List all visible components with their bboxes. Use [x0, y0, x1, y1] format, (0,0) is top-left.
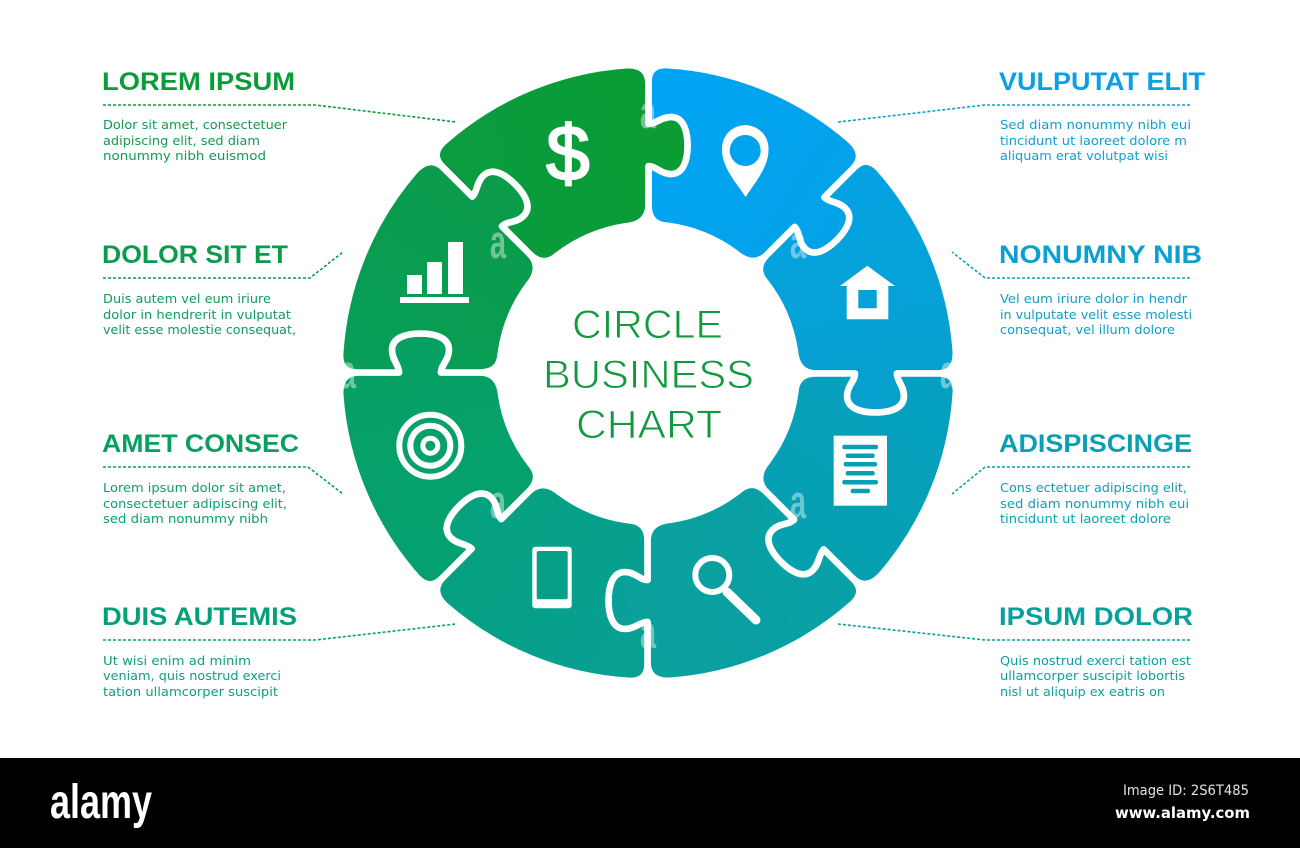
callout: Vulputat Elit: [838, 68, 1205, 163]
body text: dolor in hendrerit in vulputat: [103, 307, 291, 322]
callout: Lorem Ipsum: [102, 68, 456, 163]
body text: tincidunt ut laoreet dolore m: [1000, 133, 1187, 148]
icon: bar chart: [400, 242, 469, 303]
body text: tincidunt ut laoreet dolore: [1000, 511, 1171, 526]
watermark marks: a: [790, 215, 807, 268]
body text: [1000, 117, 1191, 163]
heading: VULPUTAT ELIT: [999, 68, 1205, 96]
watermark marks: a: [790, 475, 807, 528]
connector: [103, 252, 343, 278]
icon: house: [840, 266, 895, 319]
body text: aliquam erat volutpat wisi: [1000, 148, 1168, 163]
center title: [543, 303, 754, 447]
callout: Nonumny Nib: [952, 241, 1202, 337]
connector: [952, 252, 1190, 278]
body text: veniam, quis nostrud exerci: [103, 668, 281, 683]
body text: Duis autem vel eum iriure: [103, 291, 271, 306]
watermark marks: [340, 85, 957, 658]
icon: dollar sign: $: [546, 109, 590, 197]
callout: Adispiscinge: [952, 430, 1192, 526]
callout: Amet Consec: [102, 430, 343, 526]
watermark marks: a: [940, 345, 957, 398]
icon: document: [834, 436, 887, 506]
heading: DUIS AUTEMIS: [102, 603, 297, 631]
body text: [103, 480, 287, 526]
heading: NONUMNY NIB: [999, 241, 1202, 269]
body text: [103, 653, 281, 699]
center title: CHART: [576, 403, 722, 447]
watermark marks: a: [640, 605, 657, 658]
connector: [838, 105, 1190, 122]
watermark marks: a: [340, 345, 357, 398]
heading: LOREM IPSUM: [102, 68, 295, 96]
icon: tablet: [532, 547, 572, 608]
body text: Cons ectetuer adipiscing elit,: [1000, 480, 1187, 495]
puzzle piece: teal bottom right: [578, 453, 865, 740]
body text: [1000, 480, 1189, 526]
body text: velit esse molestie consequat,: [103, 322, 296, 337]
body text: nonummy nibh euismod: [103, 148, 266, 163]
center title: CIRCLE: [572, 303, 723, 347]
puzzle piece: green left lower: [281, 303, 568, 590]
connector: [838, 624, 1190, 640]
watermark marks: a: [490, 475, 507, 528]
body text: Lorem ipsum dolor sit amet,: [103, 480, 286, 495]
body text: in vulputate velit esse molesti: [1000, 307, 1192, 322]
body text: adipiscing elit, sed diam: [103, 133, 260, 148]
icon: location pin: [722, 125, 769, 197]
body text: consectetuer adipiscing elit,: [103, 496, 287, 511]
body text: Dolor sit amet, consectetuer: [103, 117, 288, 132]
body text: [1000, 291, 1192, 337]
puzzle piece: green-teal bottom left: [437, 485, 648, 681]
icon: magnifier: [695, 558, 756, 620]
connector: [103, 467, 343, 494]
footer logo: alamy: [50, 776, 152, 829]
body text: sed diam nonummy nibh: [103, 511, 268, 526]
body text: tation ullamcorper suscipit: [103, 684, 278, 699]
heading: DOLOR SIT ET: [102, 241, 288, 269]
body text: Ut wisi enim ad minim: [103, 653, 251, 668]
callout: Duis Autemis: [102, 603, 456, 699]
heading: AMET CONSEC: [102, 430, 299, 458]
body text: nisl ut aliquip ex eatris on: [1000, 684, 1165, 699]
footer bar: [0, 758, 1300, 848]
heading: ADISPISCINGE: [999, 430, 1192, 458]
icon: target: [399, 415, 461, 477]
body text: sed diam nonummy nibh eui: [1000, 496, 1189, 511]
puzzle piece: blue top right: [648, 65, 859, 261]
watermark marks: a: [640, 85, 657, 138]
footer image id: Image ID: 2S6T485: [1123, 783, 1249, 799]
body text: Sed diam nonummy nibh eui: [1000, 117, 1191, 132]
puzzle piece: blue right upper: [728, 156, 1015, 443]
puzzle piece: green left upper: [340, 162, 536, 372]
body text: [103, 291, 296, 337]
puzzle piece: teal right lower: [760, 374, 956, 584]
center title: BUSINESS: [543, 353, 754, 397]
body text: [1000, 653, 1191, 699]
body text: consequat, vel illum dolore: [1000, 322, 1175, 337]
callout: Dolor Sit Et: [102, 241, 343, 337]
watermark marks: a: [490, 215, 507, 268]
connector: [952, 467, 1190, 494]
connector: [103, 105, 456, 122]
callout: Ipsum Dolor: [838, 603, 1193, 699]
body text: ullamcorper suscipit lobortis: [1000, 668, 1185, 683]
body text: Quis nostrud exerci tation est: [1000, 653, 1191, 668]
chart: puzzle ring: [281, 6, 1015, 740]
body text: Vel eum iriure dolor in hendr: [1000, 291, 1188, 306]
body text: [103, 117, 288, 163]
footer url: www.alamy.com: [1115, 804, 1250, 822]
puzzle piece: green top left: [431, 6, 718, 293]
connector: [103, 624, 456, 640]
heading: IPSUM DOLOR: [999, 603, 1193, 631]
